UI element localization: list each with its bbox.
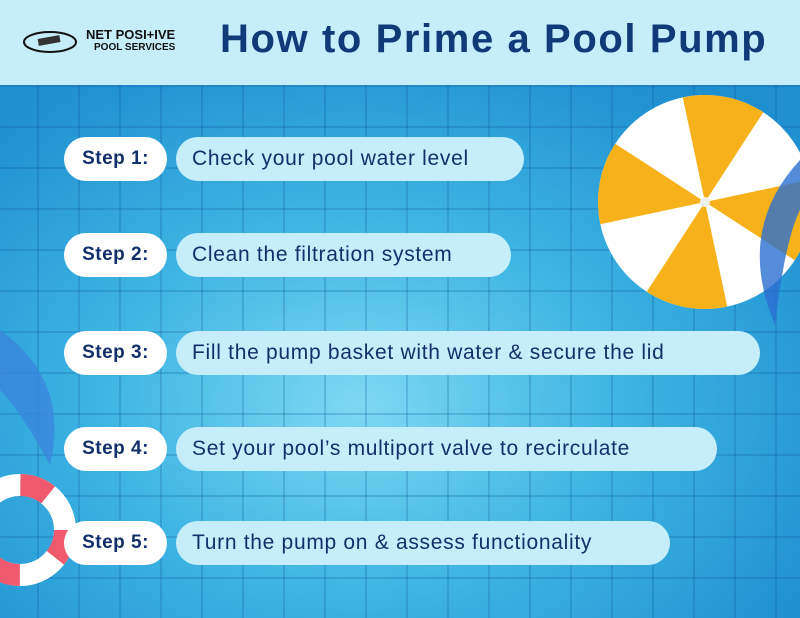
text: Step 1:: [82, 148, 149, 169]
text: Step 5:: [82, 532, 149, 553]
text: Check your pool water level: [192, 147, 469, 170]
text: Step 3:: [82, 342, 149, 363]
text: Step 2:: [82, 244, 149, 265]
lifebuoy: [0, 474, 76, 586]
step 3: [64, 331, 760, 375]
text: Step 4:: [82, 438, 149, 459]
step 4: [64, 427, 717, 471]
text: Set your pool’s multiport valve to recirculate: [192, 437, 630, 460]
step 5: [64, 521, 670, 565]
text: Turn the pump on & assess functionality: [192, 531, 592, 554]
palm leaf left: [0, 330, 54, 465]
text: Fill the pump basket with water & secure the lid: [192, 341, 664, 364]
header bar: [0, 0, 800, 85]
logo: NET POSI+IVE: [86, 27, 175, 42]
text: Clean the filtration system: [192, 243, 453, 266]
umbrella: [598, 95, 800, 309]
step 2: [64, 233, 511, 277]
title: How to Prime a Pool Pump: [220, 17, 767, 61]
step 1: [64, 137, 524, 181]
logo: POOL SERVICES: [94, 42, 175, 53]
logo: [23, 27, 175, 53]
palm leaf right: [760, 160, 800, 324]
